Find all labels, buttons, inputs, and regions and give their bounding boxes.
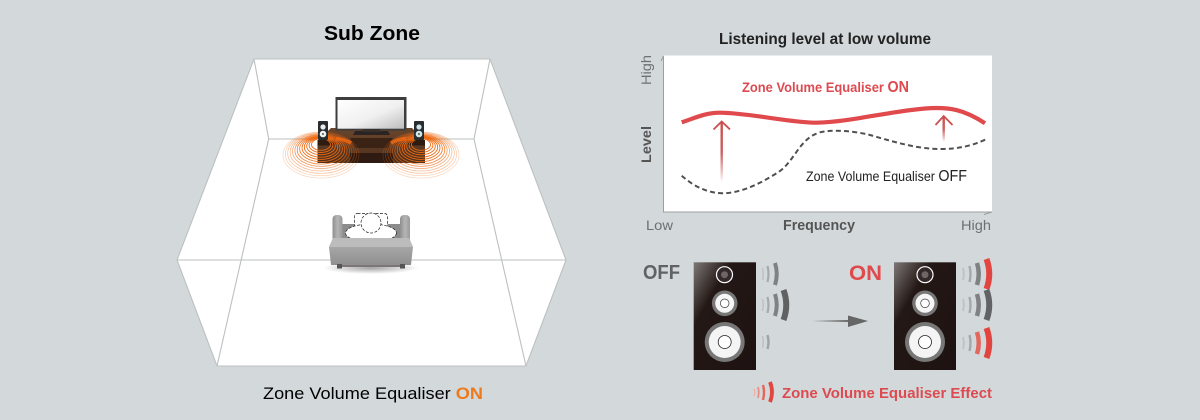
curve: equaliser off [682, 131, 987, 193]
TV cabinet [318, 128, 425, 163]
speaker: on state [894, 262, 956, 370]
label: equaliser on: Zone Volume Equaliser ON [742, 79, 909, 96]
sound wave arcs: left [283, 132, 359, 178]
right speaker [414, 121, 424, 140]
sofa with listener [323, 213, 419, 274]
y axis labels: High [638, 55, 654, 85]
arrow: high frequency boost [936, 116, 952, 142]
arrow: low frequency boost [714, 122, 730, 182]
plot area and axes [661, 56, 992, 214]
legend: Zone Volume Equaliser Effect [754, 382, 992, 402]
chart heading: Listening level at low volume [719, 31, 931, 48]
sound waves: on state [963, 259, 989, 358]
caption: Zone Volume Equaliser ON: Zone Volume Equaliser ON [263, 384, 483, 403]
curve: equaliser on [682, 108, 985, 123]
legend: Zone Volume Equaliser Effect: Zone Volume Equaliser Effect [782, 386, 992, 402]
label: equaliser off: Zone Volume Equaliser OFF [806, 168, 967, 185]
x axis labels [646, 217, 991, 234]
title: Sub Zone: Sub Zone [324, 23, 420, 45]
home theatre: TV, cabinet, speakers and sound waves [283, 97, 459, 178]
x axis labels: High [961, 217, 991, 233]
arrow: off to on [812, 316, 868, 327]
label: ON: ON [849, 262, 882, 285]
line chart: listening level [638, 55, 992, 234]
x axis labels: Low [646, 217, 674, 233]
speaker: off state [694, 262, 756, 370]
x axis labels: Frequency [783, 218, 855, 234]
y axis labels [638, 55, 654, 163]
sound waves: off state [762, 263, 786, 349]
left speaker [318, 121, 328, 140]
y axis labels: Level [638, 126, 654, 163]
sound wave arcs: right [383, 132, 459, 178]
listener [346, 213, 396, 242]
legend wave icon [754, 382, 772, 402]
room: perspective box [177, 59, 566, 366]
label: OFF: OFF [643, 262, 680, 284]
TV screen [336, 97, 406, 135]
